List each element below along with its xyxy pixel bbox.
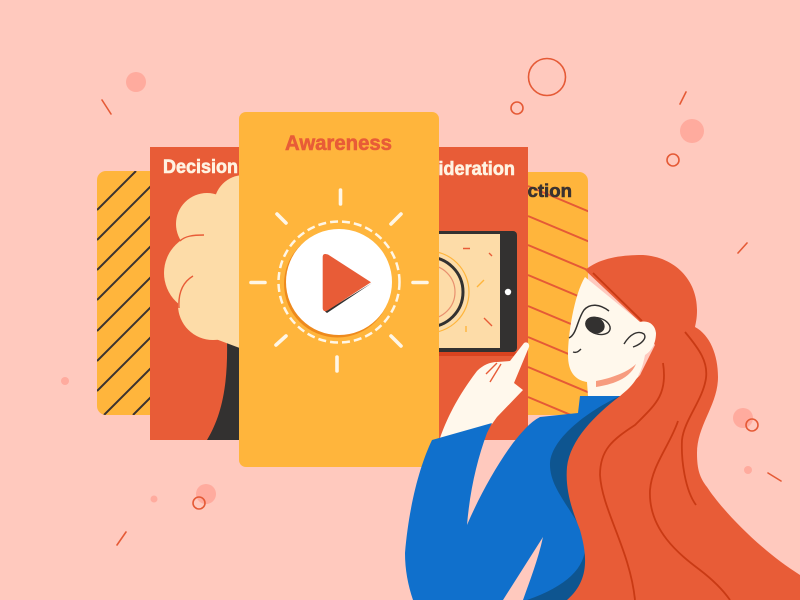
woman illustration — [405, 255, 800, 600]
hair strands — [593, 273, 730, 600]
blue robe — [405, 396, 640, 600]
heading: Awareness: Awareness — [285, 132, 392, 155]
eye — [583, 314, 612, 337]
icon: dashed ring — [278, 222, 400, 342]
neck — [588, 360, 650, 396]
heading: Decision: Decision — [163, 157, 238, 178]
card: right striped Action — [528, 172, 588, 415]
icon: play button — [284, 229, 392, 338]
heading: Consideration: Consideration — [393, 159, 515, 180]
illustration: tablet — [387, 231, 517, 356]
heading: Action: Action — [514, 180, 572, 201]
card: left striped — [97, 171, 150, 415]
card: Decision and Consideration — [150, 147, 528, 440]
face — [568, 277, 656, 396]
hand — [440, 342, 529, 445]
illustration: tree — [164, 176, 239, 440]
blue robe shadow — [527, 396, 650, 600]
card: Awareness — [239, 112, 439, 467]
decorative confetti — [61, 58, 781, 545]
hair — [567, 255, 800, 600]
icon: sun rays — [251, 190, 427, 371]
